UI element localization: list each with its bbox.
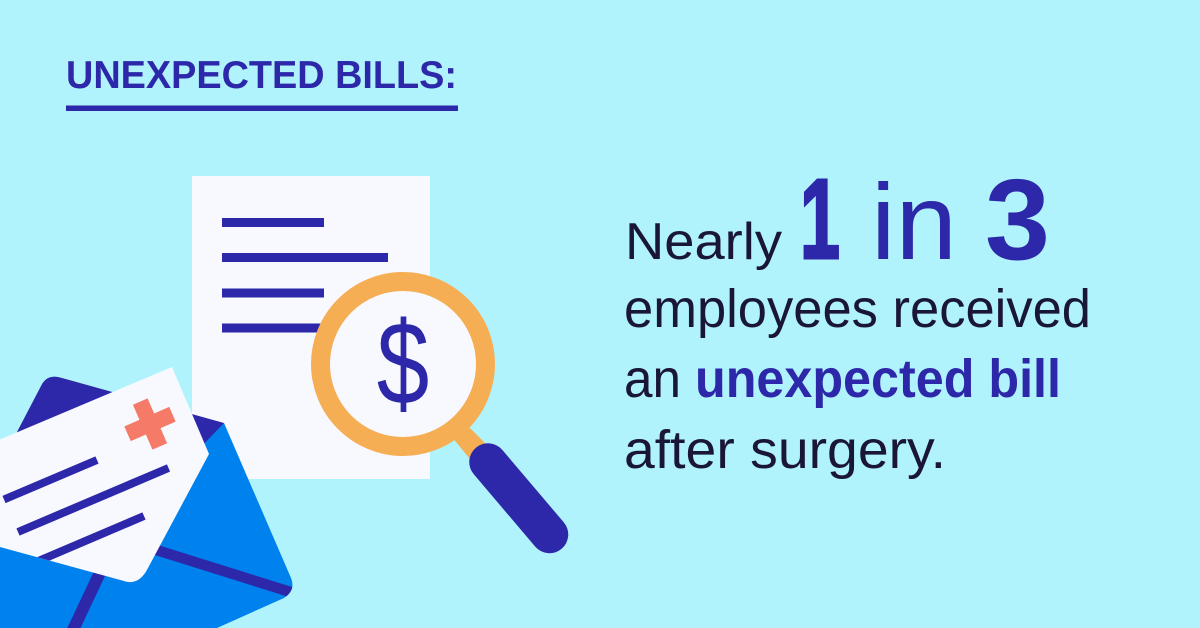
line: after surgery: after surgery.	[624, 420, 946, 480]
envelope fold lines	[72, 548, 300, 628]
document text lines	[222, 218, 388, 332]
icon: magnifying glass with dollar sign	[320, 282, 550, 534]
dollar sign: $	[377, 297, 429, 429]
magnifier neck	[452, 428, 490, 464]
medical bill card	[0, 367, 209, 582]
line: an unexpected bill: an	[624, 349, 681, 409]
heading text: UNEXPECTED BILLS:	[66, 54, 457, 97]
icon: red medical cross	[118, 392, 182, 456]
heading	[66, 54, 458, 111]
envelope back flap	[17, 377, 224, 480]
big stat: 1 in 3: 1	[800, 156, 840, 282]
illustration: document	[192, 176, 430, 479]
magnifier lens and ring	[320, 282, 486, 446]
illustration: envelope with medical bill	[0, 367, 300, 628]
big stat: 1 in 3: in	[871, 161, 957, 282]
card text lines	[4, 460, 168, 565]
statistic text block	[624, 156, 1091, 480]
line: employees received: employees received	[624, 279, 1091, 339]
heading underline	[66, 106, 458, 111]
big stat: 1 in 3: 3	[985, 156, 1050, 284]
highlighted phrase: unexpected bill: unexpected bill	[695, 349, 1061, 409]
envelope front	[0, 423, 292, 628]
line: Nearly: Nearly	[625, 213, 782, 271]
magnifier handle	[488, 462, 550, 534]
document page	[192, 176, 430, 479]
big stat: 1 in 3	[800, 156, 1050, 284]
